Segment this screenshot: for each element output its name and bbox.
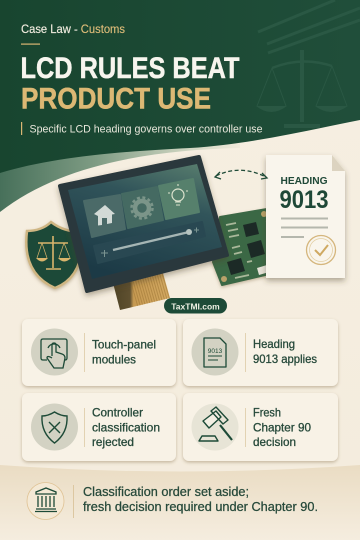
icon: document Heading 9013: 9013 xyxy=(280,186,328,214)
icon: gavel xyxy=(199,407,232,441)
card: fresh chapter 90 decision: Chapter 90 xyxy=(253,420,311,434)
icon: circuit board xyxy=(213,209,287,285)
card: heading 9013 applies xyxy=(183,319,338,386)
title: PRODUCT USE xyxy=(21,82,211,116)
card: heading 9013 applies: 9013 applies xyxy=(253,352,317,366)
title xyxy=(20,52,240,116)
tile: gear xyxy=(122,187,163,228)
header background xyxy=(0,0,360,173)
badge: TaxTMI.com xyxy=(164,298,227,314)
light green swoosh band xyxy=(0,120,240,212)
watermark: courthouse and scales xyxy=(256,0,360,126)
icon: document: 9013 xyxy=(208,348,223,355)
kicker: Case Law - Customs: Case Law - Customs xyxy=(21,22,125,36)
card: controller classification rejected: classification xyxy=(92,420,160,434)
title: LCD RULES BEAT xyxy=(20,52,240,85)
badge: TaxTMI.com: TaxTMI.com xyxy=(171,302,220,312)
icon: courthouse xyxy=(27,482,64,520)
tile: bulb xyxy=(159,179,199,219)
icon: document Heading 9013 xyxy=(266,155,345,278)
card: touch-panel modules xyxy=(22,319,176,386)
icon: shield x xyxy=(42,412,67,443)
icon: law shield xyxy=(26,222,82,288)
footer divider xyxy=(73,485,74,518)
tile: home xyxy=(84,195,125,237)
accent rule xyxy=(21,44,40,45)
card: touch-panel modules: modules xyxy=(92,352,136,366)
slider xyxy=(94,222,205,263)
card: controller classification rejected: rejected xyxy=(92,435,134,449)
footer band xyxy=(0,465,360,540)
conclusion text: Classification order set aside; xyxy=(83,485,249,499)
card: touch-panel modules: Touch-panel xyxy=(92,338,156,352)
card: fresh chapter 90 decision: decision xyxy=(253,435,296,449)
card: fresh chapter 90 decision: Fresh xyxy=(253,406,281,420)
icon: LCD display xyxy=(60,157,227,291)
card: controller classification rejected xyxy=(22,393,176,461)
screen xyxy=(68,164,222,279)
icon: touch xyxy=(41,339,67,368)
arrow: dashed double-head xyxy=(215,170,267,179)
card: fresh chapter 90 decision xyxy=(183,393,338,461)
card: controller classification rejected: Controller xyxy=(92,406,143,420)
icon: document xyxy=(204,338,226,367)
icon: flex ribbon xyxy=(113,273,170,310)
conclusion text xyxy=(83,485,318,514)
seal xyxy=(306,236,336,264)
subtitle: Specific LCD heading governs over controller use xyxy=(30,124,262,136)
conclusion text: fresh decision required under Chapter 90. xyxy=(83,500,318,514)
icon: document Heading 9013: HEADING xyxy=(280,175,328,187)
card: heading 9013 applies: Heading xyxy=(253,337,295,351)
